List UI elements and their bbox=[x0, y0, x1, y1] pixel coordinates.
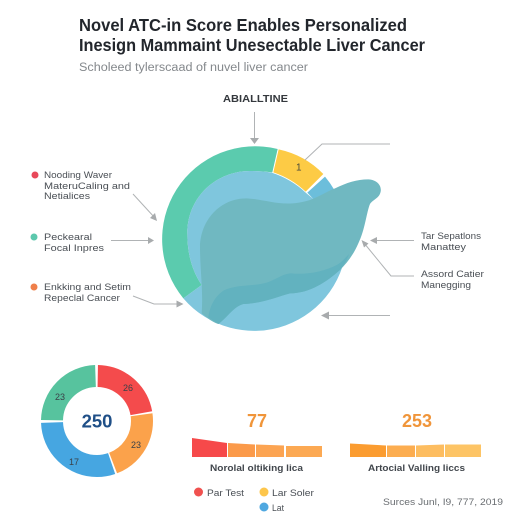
green sector bbox=[162, 146, 278, 298]
label: orange item: Repeclal Cancer bbox=[44, 293, 120, 303]
label: red item: MateruCaling and bbox=[44, 181, 130, 191]
light blue inner region bbox=[183, 171, 350, 331]
label: orange item bbox=[30, 282, 131, 303]
label: orange item: Enkking and Setim bbox=[44, 282, 131, 292]
arrow: bottom right bbox=[321, 312, 390, 320]
title: Novel ATC-in Score Enables Personalized bbox=[79, 15, 407, 35]
small blue sector bbox=[307, 177, 334, 199]
label: right upper: Tar Sepatlons bbox=[421, 231, 482, 241]
bar chart: right bbox=[350, 411, 481, 474]
liver shape bbox=[200, 179, 381, 324]
subtitle: Scholeed tylerscaad of nuvel liver cancer bbox=[79, 62, 308, 74]
source note: Surces Junl, I9, 777, 2019 bbox=[383, 497, 503, 508]
yellow sector value: 1 bbox=[296, 163, 302, 174]
top label: ABIALLTINE bbox=[223, 93, 288, 105]
title: Inesign Mammaint Unesectable Liver Cancer bbox=[79, 35, 425, 55]
bar chart: left: Norolal oltiking lica bbox=[210, 463, 304, 474]
donut segment values bbox=[55, 383, 141, 467]
label: right upper bbox=[421, 231, 482, 252]
arrow: callout to yellow sector bbox=[305, 144, 390, 160]
legend: Lar Soler bbox=[272, 488, 314, 498]
donut centre value: 250 bbox=[82, 410, 112, 432]
central liver diagram bbox=[162, 146, 381, 331]
label: green item: Peckearal bbox=[44, 232, 92, 242]
title bbox=[79, 15, 425, 55]
bar chart: left: 77 bbox=[247, 411, 267, 431]
donut segment values: 23 bbox=[55, 392, 65, 402]
legend bbox=[194, 488, 314, 512]
yellow sector bbox=[273, 149, 323, 192]
label: right lower: Manegging bbox=[421, 280, 471, 290]
arrow: red item bbox=[133, 194, 157, 221]
donut segment values: 26 bbox=[123, 383, 133, 393]
label: green item bbox=[30, 232, 105, 253]
arrow: right lower bbox=[362, 240, 414, 276]
label: right upper: Manattey bbox=[421, 242, 467, 252]
label: red item bbox=[32, 170, 130, 201]
label: red item: Netialices bbox=[44, 191, 91, 201]
donut segments bbox=[52, 376, 142, 466]
label: right lower: Assord Catier bbox=[421, 269, 484, 279]
bar chart: left bbox=[192, 411, 322, 474]
bar chart: right: Artocial Valling liccs bbox=[368, 463, 465, 474]
arrow: green item bbox=[111, 237, 154, 244]
legend: Par Test bbox=[207, 488, 245, 498]
label: right lower bbox=[421, 269, 484, 290]
label: green item: Focal Inpres bbox=[44, 243, 105, 253]
arrow: orange item bbox=[133, 296, 184, 308]
bar chart: right: 253 bbox=[402, 411, 432, 431]
arrow: top label to chart bbox=[250, 112, 259, 144]
arrow: right upper bbox=[370, 237, 414, 244]
donut segment values: 23 bbox=[131, 440, 141, 450]
label: red item: Nooding Waver bbox=[44, 170, 112, 180]
liver lower shadow bbox=[208, 254, 349, 324]
donut segment values: 17 bbox=[69, 457, 79, 467]
donut chart bbox=[52, 376, 142, 467]
